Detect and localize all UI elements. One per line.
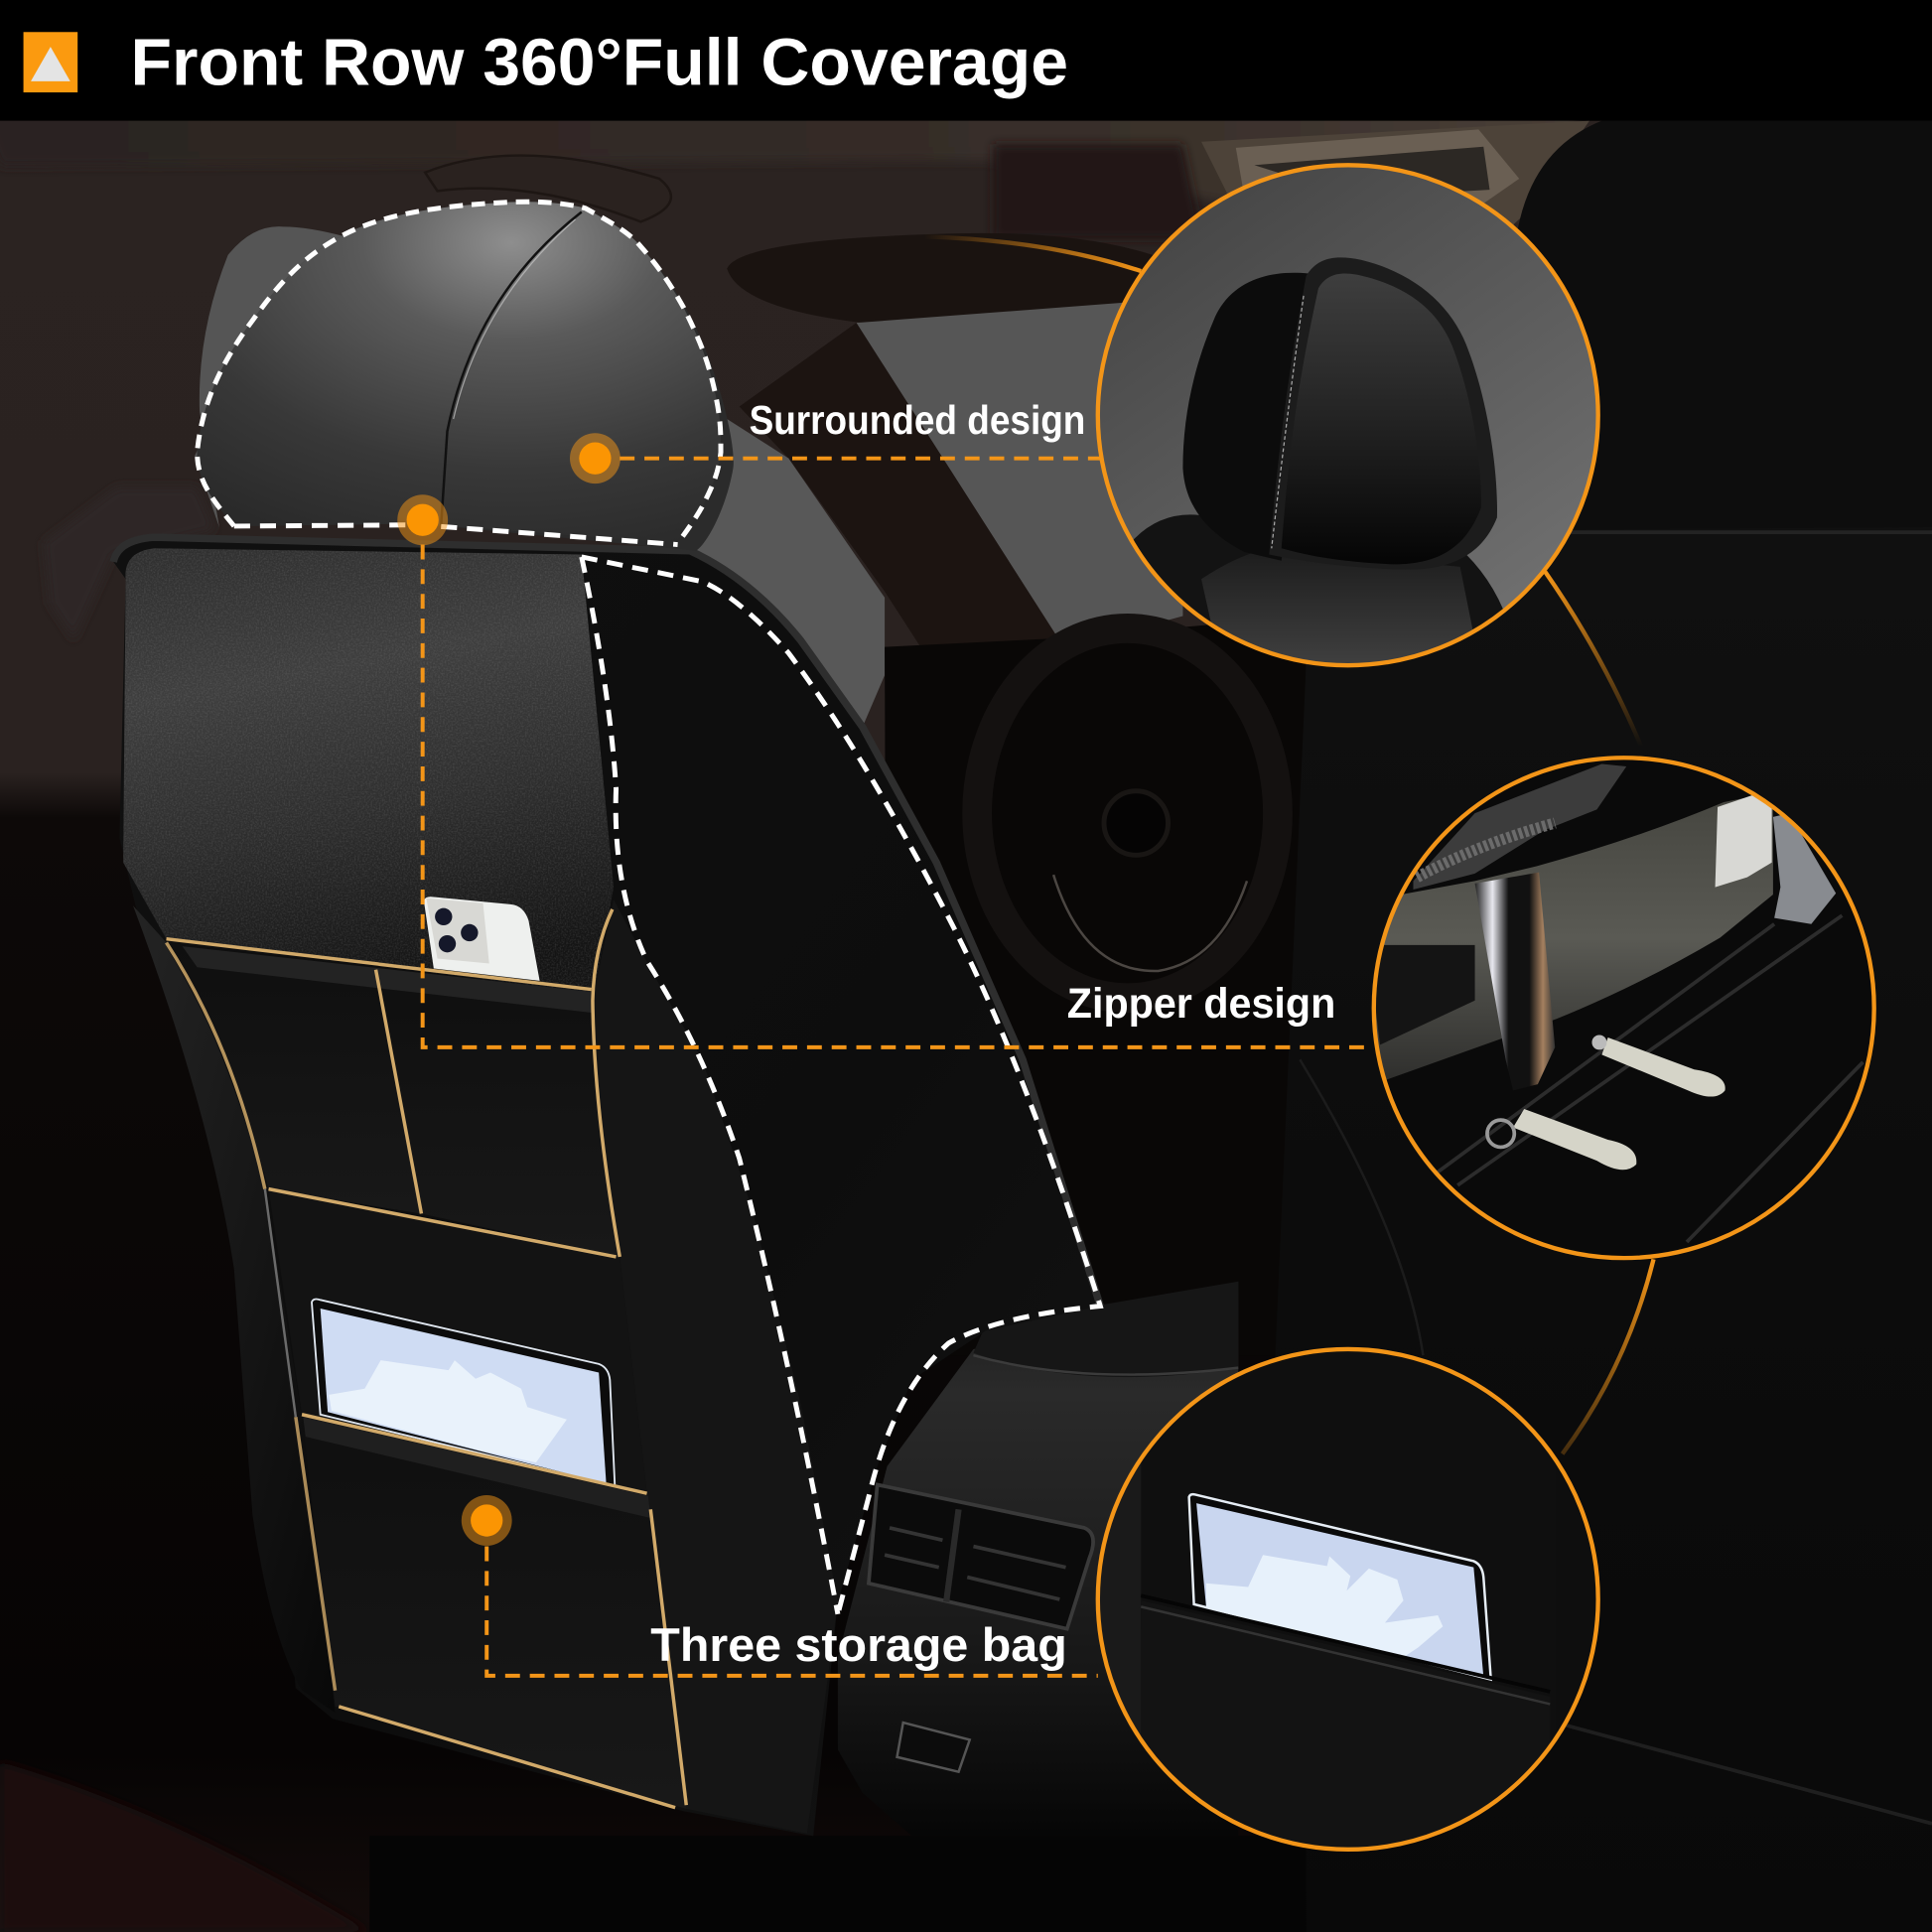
label: three storage bag: Three storage bag xyxy=(650,1618,1067,1671)
left lower wing xyxy=(133,905,336,1713)
roof vent xyxy=(1236,129,1519,209)
headrest xyxy=(198,202,734,551)
right lower wing xyxy=(594,899,838,1834)
phone in pocket xyxy=(424,897,540,981)
upper textured panel xyxy=(117,542,622,998)
windshield glass xyxy=(857,298,1182,640)
seat edge piping xyxy=(113,537,1100,1307)
ceiling xyxy=(0,98,1589,215)
zipper pull lower xyxy=(1513,1109,1636,1170)
grab handle xyxy=(425,156,671,221)
gold trim lines xyxy=(167,909,686,1808)
white stitched outline xyxy=(198,202,1100,1614)
dark left area xyxy=(1368,945,1475,1044)
air vents xyxy=(869,1484,1093,1629)
headrest seam xyxy=(441,211,582,525)
side glass xyxy=(690,419,885,727)
label: zipper design xyxy=(423,520,1371,1047)
floor xyxy=(0,1762,369,1932)
zipper pull upper xyxy=(1601,1037,1725,1097)
seat cover xyxy=(113,537,1100,1836)
label: surrounded design: Surrounded design xyxy=(750,397,1085,443)
label: zipper design: Zipper design xyxy=(1067,980,1335,1027)
upper dark trim xyxy=(993,144,1202,239)
steering wheel xyxy=(977,628,1278,998)
curved board xyxy=(1374,792,1773,1084)
left edge highlight xyxy=(265,1189,296,1417)
centre floor mat xyxy=(369,1836,1307,1932)
door shade xyxy=(43,486,215,640)
usb ports xyxy=(897,1723,970,1772)
upper pockets xyxy=(167,946,620,1257)
right seat headrest xyxy=(1491,121,1932,532)
seat shoulder xyxy=(1134,514,1503,629)
connector arcs xyxy=(924,236,1654,1453)
right seat backrest xyxy=(1276,527,1932,1932)
backrest wing and side panel xyxy=(113,537,1100,1836)
label: three storage bag xyxy=(486,1522,1098,1676)
tablet xyxy=(1189,1494,1491,1680)
leader line xyxy=(423,520,1371,1047)
rear centre console xyxy=(838,1282,1238,1836)
detail circle: headrest xyxy=(1097,165,1599,690)
leader line xyxy=(595,457,1100,460)
chrome headrest post xyxy=(1475,873,1555,1090)
right post hardware xyxy=(1773,813,1836,924)
detail circle: storage pocket xyxy=(1097,1349,1601,1852)
light headliner xyxy=(1201,121,1589,240)
tablet in pocket xyxy=(312,1300,615,1486)
detail circle: zipper xyxy=(1368,752,1885,1269)
headrest rear xyxy=(1182,273,1309,561)
lower pocket xyxy=(302,1415,686,1809)
title: Front Row 360°Full Coverage xyxy=(131,26,1068,100)
headrest front xyxy=(1269,257,1497,570)
leader line xyxy=(486,1522,1098,1676)
header bar xyxy=(0,0,1932,121)
header icon xyxy=(24,32,77,92)
window highlight xyxy=(1716,788,1772,888)
marker dots xyxy=(397,433,621,1546)
headrest shadow xyxy=(195,226,345,527)
zipper rails xyxy=(1423,915,1863,1242)
middle panel xyxy=(269,1189,647,1493)
mesh fabric xyxy=(1414,763,1626,890)
pillar xyxy=(740,323,1059,671)
sun visor xyxy=(727,233,1182,323)
pocket flap xyxy=(1141,1600,1550,1852)
lower dash xyxy=(885,617,1307,1355)
